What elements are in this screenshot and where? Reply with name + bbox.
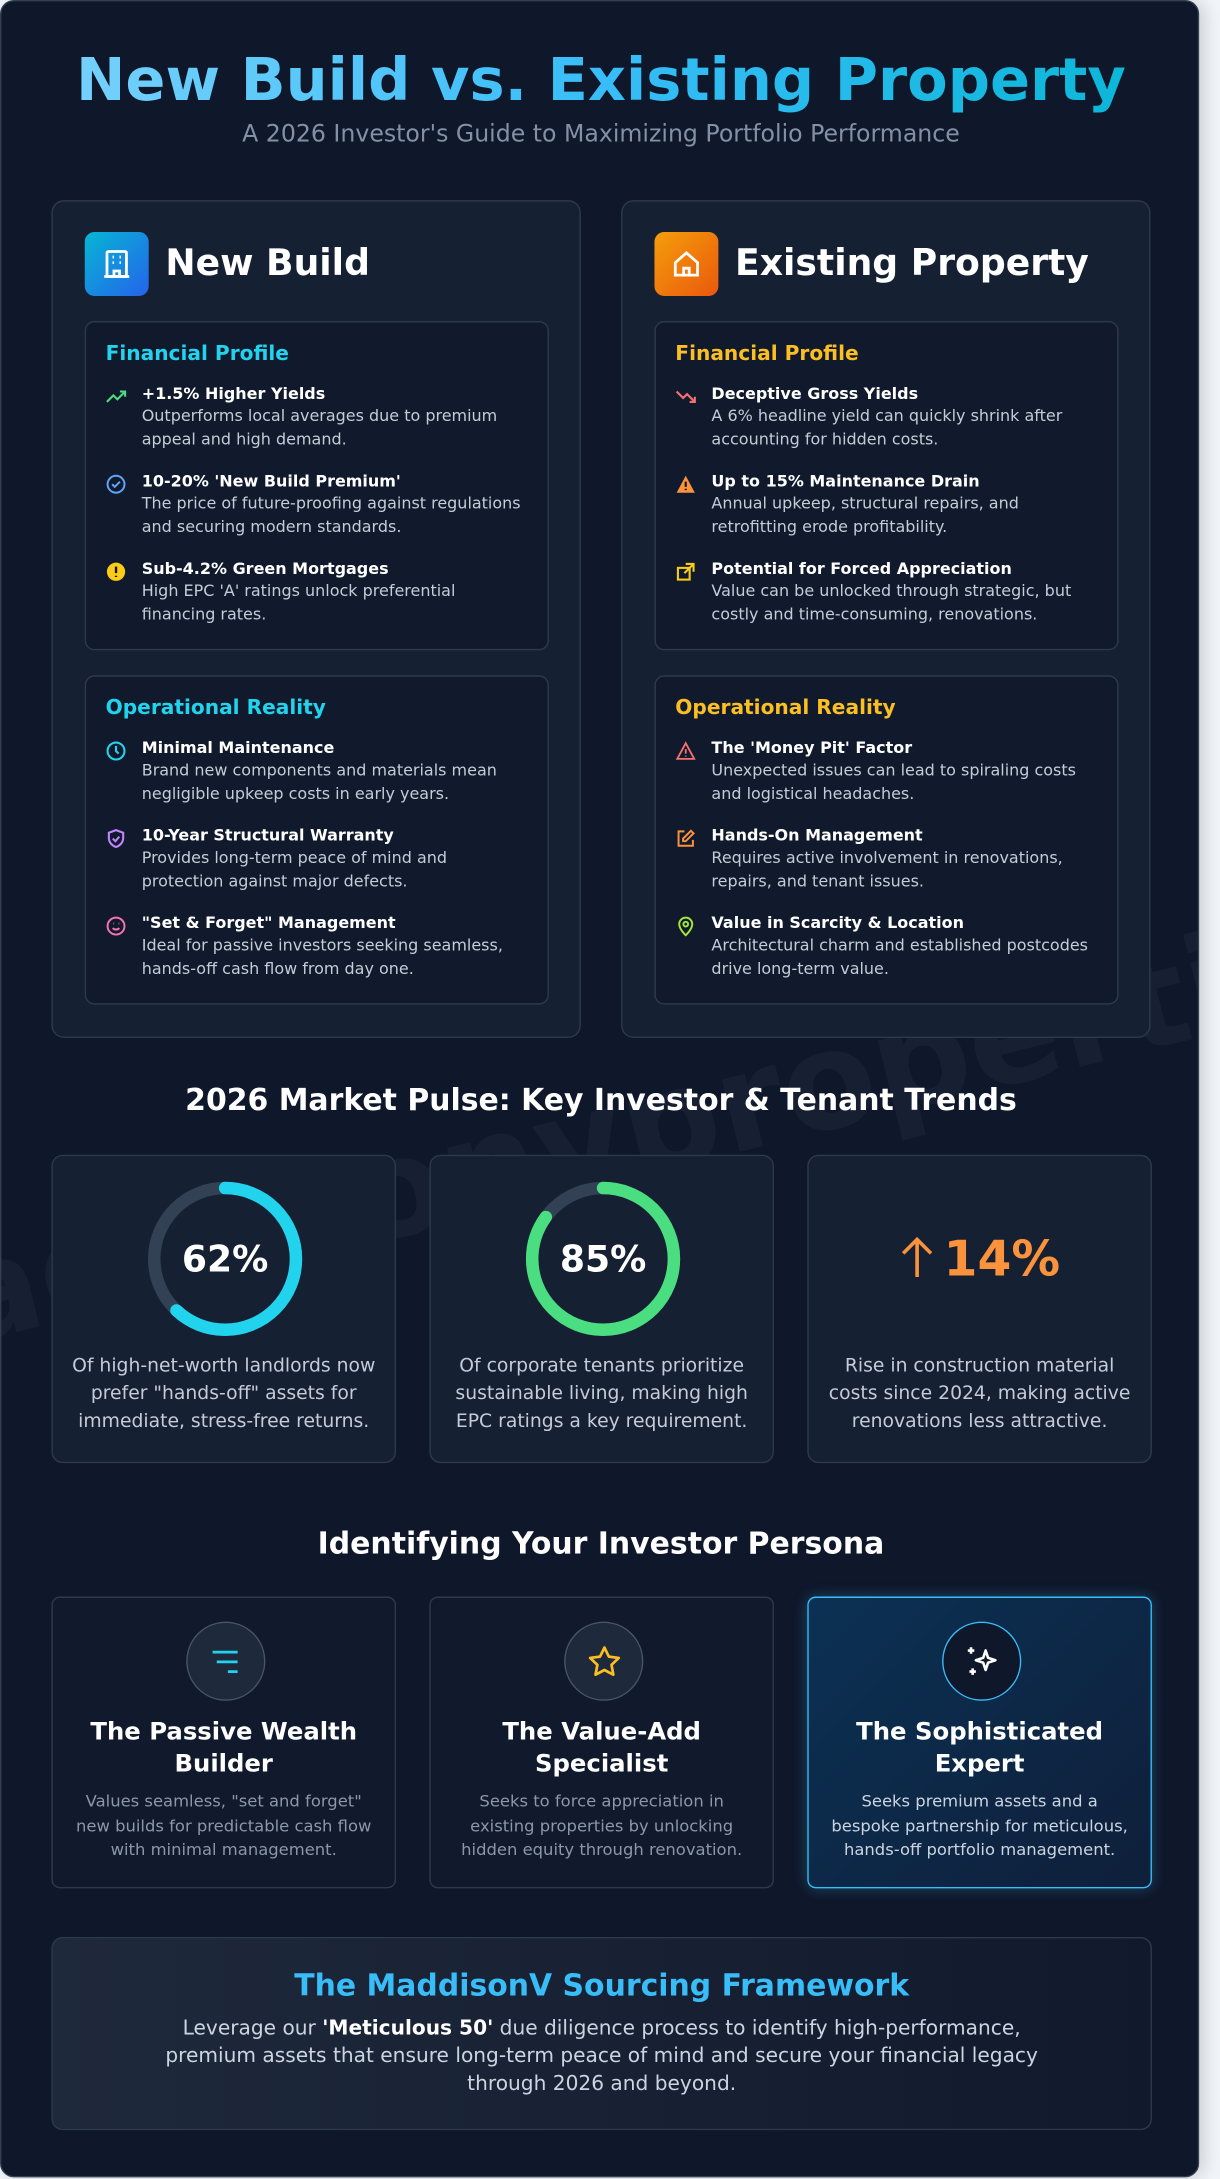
- item: higher yields: [106, 384, 497, 449]
- persona: passive wealth builder: [51, 1597, 396, 1888]
- title: New Build vs. Existing Property: [76, 47, 1126, 115]
- item: green mortgages: Sub-4.2% Green Mortgages: [142, 559, 389, 578]
- item: maintenance drain: Up to 15% Maintenance Drain: [711, 471, 980, 491]
- callout title: The MaddisonV Sourcing Framework: [294, 1969, 909, 2004]
- item: forced appreciation: Potential for Forced Appreciation: [711, 559, 1012, 578]
- box: financial profile (existing): [654, 321, 1119, 650]
- heading: market pulse: 2026 Market Pulse: Key Investor & Tenant Trends: [185, 1084, 1017, 1119]
- persona: passive wealth builder: Values seamless, "set and forget" new builds for predictable cash flow with minimal management.: [76, 1791, 371, 1859]
- item: money pit: The 'Money Pit' Factor: [711, 738, 912, 757]
- box: financial profile (new build): Financial Profile: [106, 343, 289, 365]
- item: deceptive yields: A 6% headline yield can quickly shrink after accounting for hidden costs.: [711, 406, 1062, 449]
- box: financial profile (existing): Financial Profile: [675, 343, 859, 365]
- item: maintenance drain: [676, 471, 1019, 536]
- panel header: new build: [84, 232, 370, 296]
- item: green mortgages: [106, 559, 455, 624]
- icon: star: [564, 1622, 643, 1701]
- ring chart 85%: 85%: [560, 1237, 646, 1280]
- item: warranty: 10-Year Structural Warranty: [142, 825, 394, 845]
- stat value 14%: 14%: [944, 1233, 1060, 1288]
- box: financial profile (new build): [85, 321, 549, 650]
- item: forced appreciation: [676, 559, 1071, 624]
- persona: sophisticated expert: [807, 1597, 1152, 1888]
- item: new build premium: The price of future-proofing against regulations and securing modern standards.: [142, 493, 521, 536]
- persona: sophisticated expert: Expert: [935, 1751, 1025, 1779]
- stat card: 85%: [429, 1155, 774, 1463]
- stat card: 62%: [51, 1155, 396, 1463]
- item: forced appreciation: Value can be unlocked through strategic, but costly and time-consuming, renovations.: [711, 581, 1071, 624]
- item: minimal maintenance: Minimal Maintenance: [142, 738, 334, 757]
- icon: sparkles: [942, 1622, 1021, 1701]
- item: hands-on: [678, 825, 1063, 891]
- item: higher yields: Outperforms local averages due to premium appeal and high demand.: [142, 406, 497, 449]
- panel header: new build: New Build: [165, 243, 370, 285]
- persona: passive wealth builder: The Passive Wealth: [90, 1719, 357, 1747]
- item: scarcity: Architectural charm and established postcodes drive long-term value.: [711, 935, 1088, 978]
- panel: existing property: [621, 200, 1151, 1038]
- item: warranty: [108, 825, 447, 891]
- persona: sophisticated expert: Seeks premium assets and a bespoke partnership for meticulous, hands-off portfolio management.: [831, 1791, 1128, 1859]
- persona: value-add specialist: Specialist: [535, 1751, 668, 1779]
- persona: value-add specialist: The Value-Add: [502, 1719, 701, 1747]
- item: money pit: Unexpected issues can lead to spiraling costs and logistical headaches.: [711, 760, 1076, 803]
- item: deceptive yields: [676, 384, 1062, 449]
- item: minimal maintenance: Brand new components and materials mean negligible upkeep costs in early years.: [142, 760, 497, 803]
- panel: new build: [51, 200, 581, 1038]
- persona: sophisticated expert: The Sophisticated: [856, 1719, 1103, 1747]
- box: operational reality (new build): [85, 675, 549, 1005]
- item: new build premium: 10-20% 'New Build Premium': [142, 471, 401, 491]
- persona: value-add specialist: [429, 1597, 774, 1888]
- box: operational reality (existing): Operational Reality: [675, 698, 896, 720]
- stat card: 85%: Of corporate tenants prioritize sustainable living, making high EPC ratings a key requirement.: [455, 1355, 748, 1433]
- stat card: 14%: [807, 1155, 1152, 1463]
- stat card: 14%: Rise in construction material costs since 2024, making active renovations less attractive.: [829, 1355, 1130, 1433]
- item: hands-on: Requires active involvement in renovations, repairs, and tenant issues.: [711, 848, 1063, 891]
- ring chart 62%: [148, 1182, 302, 1336]
- box: operational reality (existing): [654, 675, 1119, 1005]
- panel header: existing property: Existing Property: [735, 243, 1089, 285]
- item: set and forget: Ideal for passive investors seeking seamless, hands-off cash flow from day one.: [142, 935, 503, 978]
- callout text: Leverage our 'Meticulous 50' due diligence process to identify high-performance, premium assets that ensure long-term peace of mind and secure your financial legacy through 2026 and beyond.: [165, 2018, 1038, 2095]
- item: set and forget: [106, 913, 503, 978]
- persona: value-add specialist: Seeks to force appreciation in existing properties by unlocking hidden equity through renovation.: [461, 1791, 742, 1859]
- item: green mortgages: High EPC 'A' ratings unlock preferential financing rates.: [142, 581, 455, 624]
- heading: investor persona: Identifying Your Investor Persona: [318, 1527, 884, 1562]
- item: maintenance drain: Annual upkeep, structural repairs, and retrofitting erode profitability.: [711, 493, 1019, 536]
- item: warranty: Provides long-term peace of mind and protection against major defects.: [142, 848, 447, 891]
- panel header: existing property: [654, 232, 1089, 296]
- stat card: 62%: Of high-net-worth landlords now prefer "hands-off" assets for immediate, stress-free returns.: [72, 1355, 375, 1433]
- ring chart 62%: 62%: [182, 1237, 268, 1280]
- item: set and forget: "Set & Forget" Management: [142, 913, 396, 932]
- icon: lines: [186, 1622, 265, 1701]
- item: new build premium: [106, 471, 521, 536]
- item: deceptive yields: Deceptive Gross Yields: [711, 384, 918, 403]
- item: money pit: [676, 738, 1076, 803]
- item: scarcity: Value in Scarcity & Location: [711, 913, 964, 932]
- persona: passive wealth builder: Builder: [174, 1751, 273, 1779]
- callout: sourcing framework: [51, 1937, 1152, 2130]
- subtitle: A 2026 Investor's Guide to Maximizing Portfolio Performance: [242, 121, 960, 149]
- box: operational reality (new build): Operational Reality: [106, 698, 326, 720]
- ring chart 85%: [526, 1182, 680, 1336]
- item: hands-on: Hands-On Management: [711, 825, 923, 845]
- item: scarcity: [678, 913, 1088, 978]
- item: minimal maintenance: [106, 738, 497, 803]
- item: higher yields: +1.5% Higher Yields: [142, 384, 325, 403]
